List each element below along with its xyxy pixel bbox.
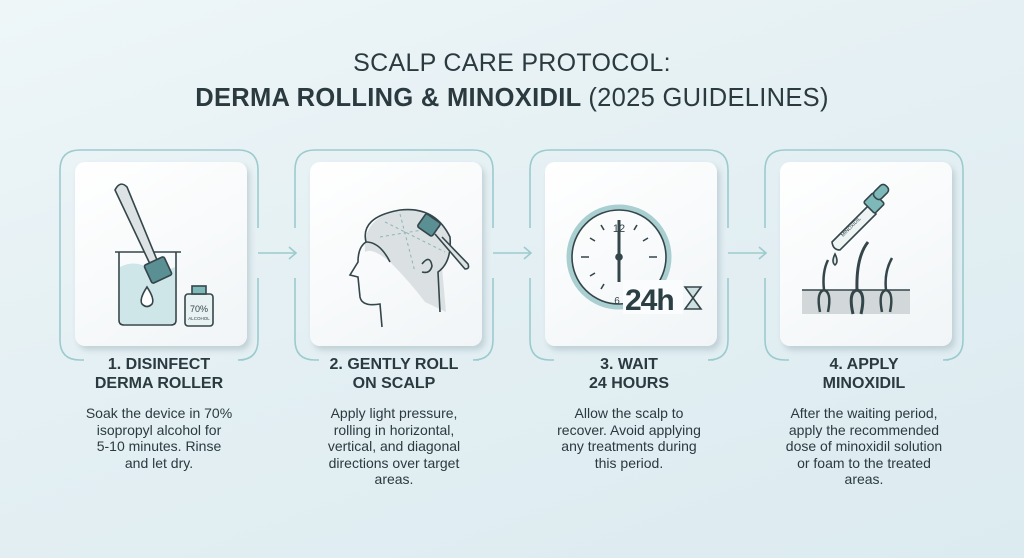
panel: step 1 card <box>75 162 247 346</box>
text: step 2: rolling in horizontal, <box>334 422 454 438</box>
text: step 3: Allow the scalp to <box>575 405 683 421</box>
heading: step 1: DERMA ROLLER <box>95 375 223 392</box>
heading: step 1: 1. DISINFECT <box>108 356 210 373</box>
text: step 2: areas. <box>375 471 413 487</box>
text: step 4: apply the recommended <box>789 422 939 438</box>
heading: step 2: 2. GENTLY ROLL <box>330 356 458 373</box>
heading: step 4: 4. APPLY <box>829 356 899 373</box>
heading: step 3: 24 HOURS <box>589 375 669 392</box>
icon: clock 24h: 12 <box>613 223 625 235</box>
text: step 1: and let dry. <box>125 454 193 470</box>
heading: step 2 <box>330 356 458 392</box>
text: step 4 <box>786 405 942 487</box>
heading: step 2: ON SCALP <box>353 375 435 392</box>
text: step 1: isopropyl alcohol for <box>97 422 221 438</box>
text: step 3 <box>557 405 701 471</box>
text: step 3: this period. <box>595 454 663 470</box>
icon: dropper over hair follicles <box>802 184 910 314</box>
text: step 3: recover. Avoid applying <box>557 422 701 438</box>
icon: clock 24h: 24h <box>625 284 674 317</box>
text: step 1: 5-10 minutes. Rinse <box>97 438 221 454</box>
panel: step 2 card <box>310 162 482 346</box>
text: step 4: or foam to the treated <box>797 454 931 470</box>
subtitle: DERMA ROLLING & MINOXIDIL (2025 GUIDELINES) <box>195 84 829 112</box>
heading: step 1 <box>95 356 223 392</box>
text: step 3: any treatments during <box>561 438 697 454</box>
text: step 1: Soak the device in 70% <box>86 405 232 421</box>
title: SCALP CARE PROTOCOL: <box>353 49 671 77</box>
panel: step 3 card <box>545 162 717 346</box>
heading: step 4: MINOXIDIL <box>823 375 905 392</box>
icon: roller in beaker with alcohol bottle: 70% <box>190 304 208 314</box>
panel: step 4 card <box>780 162 952 346</box>
icon: roller in beaker with alcohol bottle: ALCOHOL <box>188 316 210 321</box>
icon: head with roller <box>348 208 470 328</box>
icon: clock 24h <box>566 204 702 317</box>
heading: step 4 <box>823 356 905 392</box>
text: step 2: vertical, and diagonal <box>328 438 460 454</box>
heading: step 3 <box>589 356 669 392</box>
text: step 4: dose of minoxidil solution <box>786 438 942 454</box>
text: step 2: Apply light pressure, <box>331 405 457 421</box>
text: step 2 <box>328 405 460 487</box>
icon: dropper over hair follicles: MINOXIDIL <box>840 216 863 238</box>
text: step 1 <box>86 405 232 471</box>
icon: roller in beaker with alcohol bottle <box>114 183 214 327</box>
icon: clock 24h: 6 <box>614 296 620 307</box>
text: step 4: After the waiting period, <box>790 405 938 421</box>
text: step 2: directions over target <box>329 454 459 470</box>
text: step 4: areas. <box>845 471 883 487</box>
heading: step 3: 3. WAIT <box>600 356 658 373</box>
